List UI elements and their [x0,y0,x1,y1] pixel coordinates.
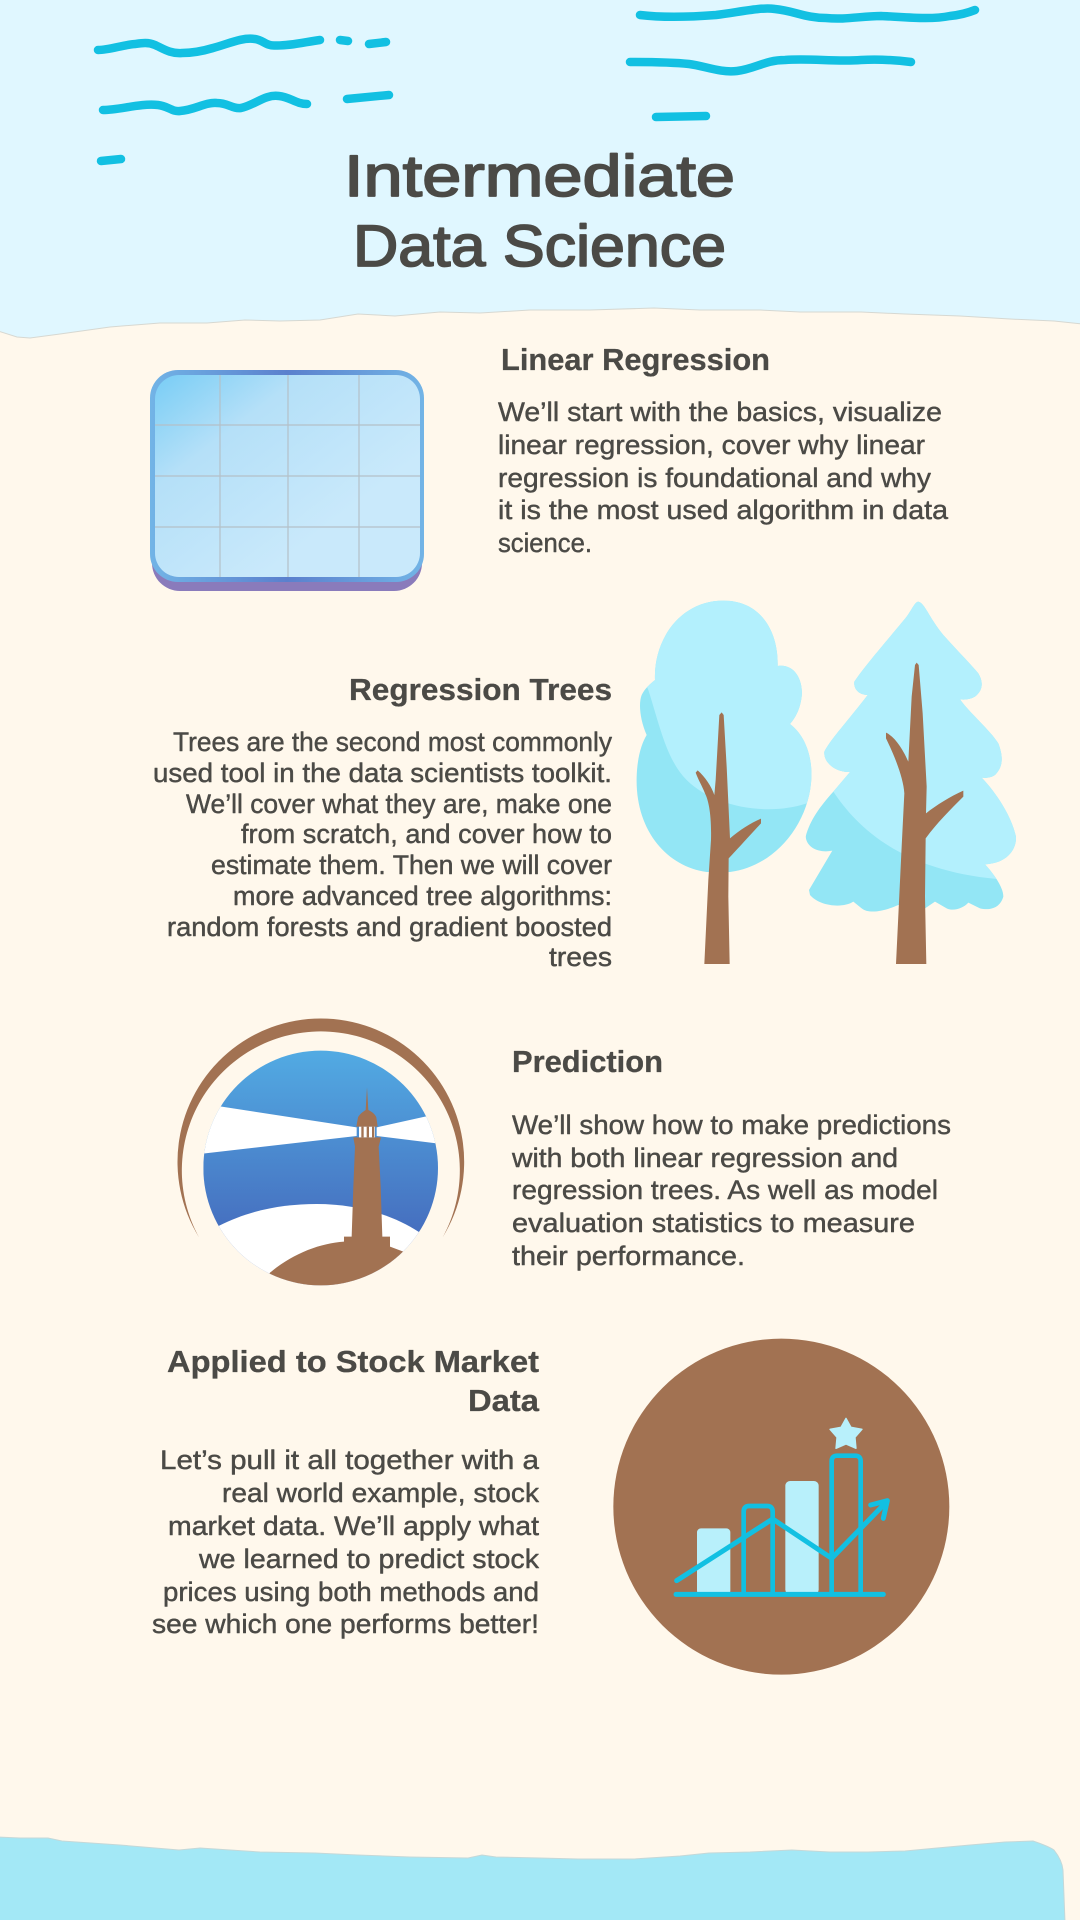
icon: stock chart [613,1339,949,1675]
icon: pine tree [806,602,1016,964]
text block: linear regression: linear regression, cover why linear [498,430,925,460]
heading: prediction: Prediction [512,1044,663,1079]
text block: prediction: their performance. [512,1241,745,1271]
text block: prediction: regression trees. As well as model [512,1175,938,1205]
panel: applied to stock market data [152,1339,949,1675]
text block: regression trees: We’ll cover what they are, make one [186,789,612,819]
text block: linear regression: regression is foundational and why [498,463,932,493]
text block: prediction: with both linear regression and [511,1143,898,1173]
text block: linear regression: science. [498,528,592,558]
icon: lighthouse [177,1018,464,1290]
text block: regression trees: more advanced tree algorithms: [233,881,612,911]
text block: stock market: Let’s pull it all together with a [160,1445,540,1475]
text block: stock market: see which one performs better! [152,1609,539,1639]
text block: regression trees: trees [549,942,612,972]
text block: linear regression [498,397,949,558]
text block: prediction: evaluation statistics to measure [512,1208,915,1238]
icon: grid panel [150,370,424,591]
text block: linear regression: We’ll start with the basics, visualize [498,397,942,427]
text block: regression trees: random forests and gradient boosted [167,912,612,942]
heading: linear regression: Linear Regression [501,342,770,377]
text block: regression trees [153,727,612,972]
icon: two trees [636,600,1016,964]
text block: stock market: prices using both methods and [163,1577,539,1607]
text block: regression trees: used tool in the data scientists toolkit. [153,758,612,788]
text block: regression trees: estimate them. Then we will cover [211,850,612,880]
heading: regression trees: Regression Trees [349,672,612,707]
text block: stock market: real world example, stock [222,1478,540,1508]
text block: linear regression: it is the most used algorithm in data [498,495,949,525]
title: Data Science [353,214,726,279]
decorative scribble lines [98,9,975,161]
text block: regression trees: from scratch, and cover how to [241,819,612,849]
panel: prediction [177,1018,951,1290]
text block: prediction: We’ll show how to make predictions [512,1110,951,1140]
text block: prediction [511,1110,951,1271]
heading: applied to stock market data: Data [468,1383,540,1418]
text block: regression trees: Trees are the second most commonly [173,727,612,757]
title: Intermediate [344,144,735,209]
heading: applied to stock market data [167,1344,540,1418]
icon: round tree [636,600,812,964]
footer torn paper band [0,1837,1065,1920]
text block: stock market [152,1445,540,1639]
panel: linear regression [150,342,949,591]
heading: applied to stock market data: Applied to Stock Market [167,1344,539,1379]
panel: regression trees [153,580,1033,972]
text block: stock market: we learned to predict stock [198,1544,540,1574]
header torn paper band [0,0,1080,338]
title [344,144,735,279]
text block: stock market: market data. We’ll apply what [168,1511,540,1541]
